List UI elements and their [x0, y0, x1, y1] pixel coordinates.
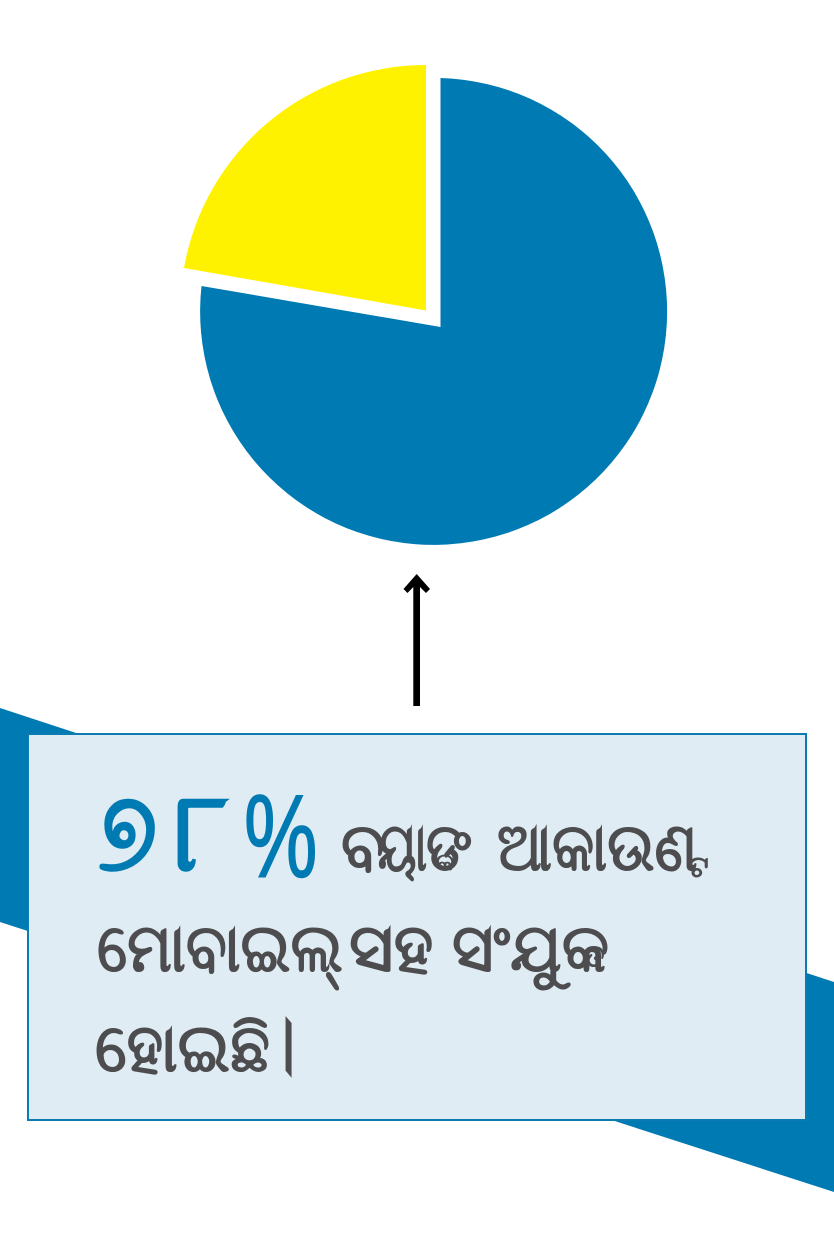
big figure: 78%: %	[244, 771, 317, 903]
big figure: 78%: ୭	[98, 771, 157, 894]
callout text	[95, 771, 709, 1088]
text line 3: ।	[272, 998, 298, 1088]
pie slice: yellow 22%	[184, 65, 426, 311]
text line 2: ସହ	[349, 910, 434, 986]
text line 1: କ	[436, 849, 454, 876]
big figure: 78%	[98, 771, 317, 903]
text line 3: ହୋଇଛି	[95, 1010, 270, 1086]
callout box	[27, 733, 807, 1121]
arrow pointing to the pie chart	[404, 574, 430, 706]
big figure: 78%: ୮	[174, 771, 229, 894]
diagonal blue band behind callout	[0, 708, 834, 1192]
text line 1: ୟା	[378, 809, 427, 885]
text line 2	[97, 910, 609, 990]
pie chart	[184, 65, 667, 545]
text line 1: ଟ	[688, 851, 709, 884]
pie slice: blue 78%	[200, 78, 667, 545]
text line 1	[341, 809, 709, 885]
text line 2: ସଂଯୁକ୍	[452, 910, 609, 986]
text line 2: ମୋବାଇଲ୍	[97, 910, 343, 986]
text line 1: ଙ୍	[426, 809, 473, 885]
text line 1: ଆକାଉଣ୍	[497, 809, 698, 885]
text line 1: ବ୍	[341, 809, 385, 885]
text line 2: ତ	[583, 939, 605, 974]
